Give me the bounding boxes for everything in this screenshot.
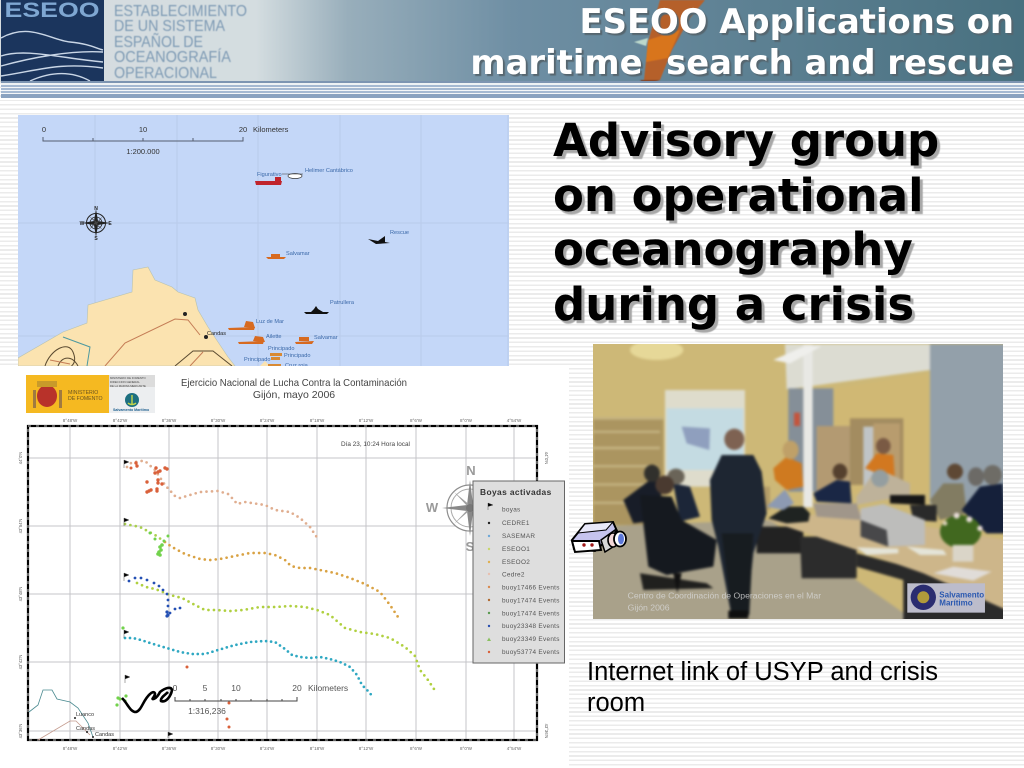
chart title: Ejercicio Nacional de Lucha Contra la Contaminación xyxy=(181,377,407,389)
buoy event dots red xyxy=(130,461,230,728)
legend: Boyas activadas: Cedre2 xyxy=(502,572,525,578)
buoy flags xyxy=(124,460,173,738)
drift track: SASEMAR xyxy=(125,638,373,698)
icon: helicopter xyxy=(282,174,303,178)
icon: orange boats Principado xyxy=(268,353,282,367)
icon: large compass rose: N xyxy=(466,463,476,478)
ESEOO organisation name: ESPAÑOL DE xyxy=(114,34,203,51)
inset coast map: Candas xyxy=(95,732,114,738)
icon: compass rose xyxy=(80,206,112,242)
longitude labels: 8°6'W xyxy=(410,746,423,751)
longitude labels: 8°18'W xyxy=(310,418,325,423)
icon: black patrol ship xyxy=(304,306,329,314)
chart scale bar: 0 xyxy=(173,683,178,693)
longitude labels: 8°0'W xyxy=(460,418,473,423)
legend: Boyas activadas: CEDRE1 xyxy=(502,520,530,527)
vessel labels: Luz de Mar xyxy=(256,319,284,325)
icon: large compass rose xyxy=(426,463,498,554)
legend: Boyas activadas: SASEMAR xyxy=(502,533,535,540)
Spanish ministry logo: DIRECCION GENERAL xyxy=(110,380,140,384)
icon: compass rose: N xyxy=(94,206,98,212)
vessel labels: Salvamar xyxy=(314,335,338,341)
scale bar: 20 xyxy=(239,125,247,134)
longitude labels: 8°24'W xyxy=(260,418,275,423)
longitude labels: 8°12'W xyxy=(359,746,374,751)
scale bar xyxy=(42,125,289,156)
chart scale bar: 5 xyxy=(203,683,208,693)
icon: orange ship Salvamar 2 xyxy=(295,337,314,344)
legend: Boyas activadas: buoy23349 Events xyxy=(502,636,560,643)
icon: orange ship Luz de Mar xyxy=(228,321,255,330)
icon: compass rose: S xyxy=(94,236,98,242)
Spanish ministry logo: Salvamento Marítimo xyxy=(113,408,150,412)
scale bar: 10 xyxy=(139,125,147,134)
drift track: CEDRE1 xyxy=(122,688,172,712)
heading: advisory group: Advisory group on operational oceanography during a crisis xyxy=(553,114,939,331)
icon: rescue aircraft xyxy=(368,236,390,244)
scale bar: Kilometers xyxy=(253,125,289,134)
map frame xyxy=(28,426,537,740)
buoy event dots blue xyxy=(128,577,181,618)
longitude labels: 8°24'W xyxy=(260,746,275,751)
photo logo: Marítimo xyxy=(939,598,973,607)
ESEOO organisation name xyxy=(114,3,247,82)
vessel labels xyxy=(244,168,409,369)
vessel labels: Principado xyxy=(244,357,270,363)
vessel labels: Patrullera xyxy=(330,300,355,306)
photo logo xyxy=(907,583,985,613)
longitude labels: 8°30'W xyxy=(211,746,226,751)
icon: orange ship Ailette xyxy=(238,336,265,344)
longitude labels: 8°48'W xyxy=(63,746,78,751)
vessel labels: Principado xyxy=(268,346,294,352)
inset coast map xyxy=(29,690,114,740)
longitude labels: 8°0'W xyxy=(460,746,473,751)
legend: Boyas activadas: buoy17474 Events xyxy=(502,610,560,618)
latitude labels: 43°48'N xyxy=(18,587,23,601)
vessel labels: Helimer Cantábrico xyxy=(305,168,353,174)
photo logo: Salvamento xyxy=(939,590,984,599)
icon: large compass rose: S xyxy=(466,539,475,554)
chart scale bar xyxy=(173,683,348,716)
latitude labels: 43°42'N xyxy=(18,655,23,669)
longitude labels: 8°18'W xyxy=(310,746,325,751)
longitude labels: 8°48'W xyxy=(63,418,78,423)
chart title xyxy=(181,377,407,401)
legend: Boyas activadas: ESEOO1 xyxy=(502,546,530,553)
longitude labels: 8°42'W xyxy=(113,418,128,423)
ESEOO logo xyxy=(1,0,104,81)
panel: buoy drift chart xyxy=(0,366,569,768)
inset coast map: Candas xyxy=(76,726,95,732)
longitude labels: 4°54'W xyxy=(507,418,522,423)
timestamp: Día 23, 10:24 Hora local xyxy=(341,441,410,448)
latitude labels xyxy=(18,452,549,738)
ESEOO organisation name: ESTABLECIMIENTO xyxy=(114,3,247,20)
legend: Boyas activadas: ESEOO2 xyxy=(502,559,530,566)
map land area xyxy=(18,267,270,366)
inset coast map: Luanco xyxy=(76,712,94,718)
chart scale bar: 10 xyxy=(231,683,241,693)
drift track: ESEOO1 xyxy=(137,583,436,692)
photo caption: Centro de Coordinación de Operaciones en el Mar xyxy=(628,591,821,601)
latitude labels: 44°0'N xyxy=(544,452,549,464)
longitude labels xyxy=(63,418,522,751)
ESEOO organisation name: OCEANOGRAFÍA xyxy=(114,49,232,66)
vessel labels: Principado xyxy=(284,353,310,359)
Spanish ministry logo xyxy=(26,375,155,413)
vessel labels: Figurativo xyxy=(257,172,282,178)
legend: Boyas activadas: boyas xyxy=(502,506,521,514)
icon: red ship Figurativo xyxy=(255,177,282,185)
chart scale bar: 1:316,236 xyxy=(188,706,226,716)
buoy event dots green xyxy=(115,532,170,707)
photo caption: Gijón 2006 xyxy=(628,602,670,612)
longitude labels: 8°12'W xyxy=(359,418,374,423)
legend: Boyas activadas xyxy=(473,481,564,663)
legend: Boyas activadas: Boyas activadas xyxy=(480,487,552,497)
legend: Boyas activadas: buoy53774 Events xyxy=(502,649,560,656)
icon: orange rescue ship xyxy=(634,0,705,82)
text: internet link caption: Internet link of USYP and crisis room xyxy=(587,658,938,717)
Spanish ministry logo: MINISTERIO xyxy=(68,390,98,396)
Spanish ministry logo: MINISTERIO DE FOMENTO xyxy=(110,376,147,380)
ESEOO organisation name: DE UN SISTEMA xyxy=(114,18,226,35)
icon: video camera link xyxy=(570,521,627,554)
longitude labels: 8°6'W xyxy=(410,418,423,423)
panel: vessel position map xyxy=(18,115,509,366)
vessel labels: Rescue xyxy=(390,230,409,236)
photo caption xyxy=(628,591,821,612)
drift track: ESEOO2 xyxy=(125,524,400,620)
icon: compass rose: E xyxy=(108,221,112,227)
icon: large compass rose: W xyxy=(426,500,439,515)
icon: orange ship Salvamar xyxy=(266,254,286,259)
drift track: Cedre2 xyxy=(127,461,318,539)
longitude labels: 8°36'W xyxy=(162,418,177,423)
latitude labels: 44°0'N xyxy=(18,452,23,464)
chart scale bar: 20 xyxy=(292,683,302,693)
legend: Boyas activadas: buoy17474 Events xyxy=(502,598,560,604)
map land area: Candas xyxy=(207,331,226,337)
longitude labels: 8°36'W xyxy=(162,746,177,751)
Spanish ministry logo: DE LA MARINA MERCANTE xyxy=(110,384,146,388)
longitude labels: 4°54'W xyxy=(507,746,522,751)
header title: ESEOO Applications on maritime search and rescue xyxy=(470,2,1014,82)
longitude labels: 8°42'W xyxy=(113,746,128,751)
latitude labels: 43°36'N xyxy=(18,724,23,738)
ESEOO organisation name: OPERACIONAL xyxy=(114,65,217,82)
chart title: Gijón, mayo 2006 xyxy=(253,389,335,401)
Spanish ministry logo: DE FOMENTO xyxy=(68,396,102,402)
legend: Boyas activadas: buoy17466 Events xyxy=(502,584,560,592)
legend: Boyas activadas: buoy23348 Events xyxy=(502,623,560,630)
chart scale bar: Kilometers xyxy=(308,683,348,693)
vessel labels: Salvamar xyxy=(286,251,310,257)
scale bar: 1:200.000 xyxy=(126,147,160,156)
latitude labels: 43°36'N xyxy=(544,724,549,738)
photo: crisis room meeting xyxy=(593,344,1003,619)
scale bar: 0 xyxy=(42,125,46,134)
header banner xyxy=(0,0,1024,100)
longitude labels: 8°30'W xyxy=(211,418,226,423)
vessel labels: Ailette xyxy=(266,334,282,340)
latitude labels: 43°54'N xyxy=(18,519,23,533)
icon: compass rose: W xyxy=(80,221,85,227)
